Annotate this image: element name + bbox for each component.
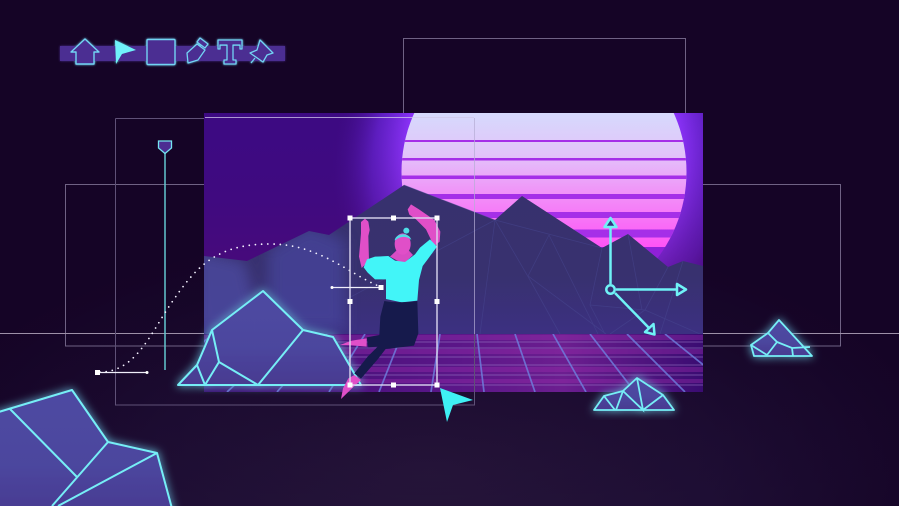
vertical slider xyxy=(158,141,172,370)
foot: front xyxy=(341,375,361,399)
dotted bezier curve xyxy=(95,244,381,375)
right arm xyxy=(408,204,440,247)
rock: large foreground xyxy=(0,390,174,506)
low-poly mountains xyxy=(196,185,703,336)
left arm xyxy=(359,219,370,268)
left bezier handle xyxy=(95,370,148,375)
toolbar xyxy=(60,38,285,64)
rock: large centre xyxy=(178,291,361,385)
rock: small middle xyxy=(594,378,674,410)
icon: pen xyxy=(187,38,208,63)
icon: pointer xyxy=(115,40,136,64)
icon: home xyxy=(71,39,99,64)
toolbar band xyxy=(60,46,285,61)
cursor arrow xyxy=(440,388,473,422)
outer artboard frame xyxy=(116,118,474,405)
icon: pin xyxy=(250,40,273,63)
neck and head xyxy=(390,228,413,264)
foot: back xyxy=(340,338,367,347)
wireframe guide rectangles xyxy=(0,38,899,346)
slider handle xyxy=(158,141,172,154)
grid floor xyxy=(204,334,703,392)
shirt xyxy=(364,239,437,302)
transform gizmo xyxy=(604,218,686,334)
icon: square xyxy=(147,40,175,64)
dancing figure xyxy=(359,204,440,302)
icon: type tool xyxy=(218,40,242,64)
figure lower body xyxy=(340,301,418,399)
right bezier handle xyxy=(330,285,384,290)
striped sun xyxy=(402,113,686,258)
trousers xyxy=(354,301,418,379)
sky xyxy=(204,113,703,267)
rock: small right xyxy=(751,320,812,356)
selection box xyxy=(348,216,440,388)
scene image panel xyxy=(204,113,703,392)
